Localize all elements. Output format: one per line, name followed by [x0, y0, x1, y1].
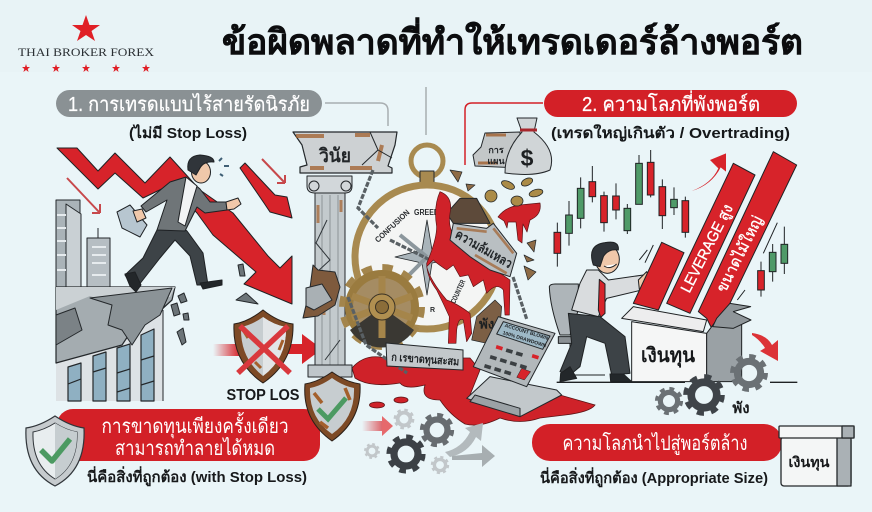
heading pill 1: 1. การเทรดแบบไร้สายรัดนิรภัย — [68, 93, 310, 116]
illustration: city and crumbling ledge — [56, 200, 258, 401]
plate: accumulated losses — [386, 343, 463, 370]
illustration: brass gear — [344, 269, 420, 348]
chart: candlesticks — [554, 150, 788, 297]
title: ข้อผิดพลาดที่ทำให้เทรดเดอร์ล้างพอร์ต — [222, 17, 803, 62]
subheading 1: (ไม่มี Stop Loss) — [129, 123, 247, 142]
heading pill 2 — [544, 90, 797, 117]
bottom callout: right: ความโลภนำไปสู่พอร์ตล้าง — [562, 432, 748, 456]
bottom callout: right — [532, 424, 782, 461]
arrow: red downward — [752, 333, 778, 361]
label: high leverage: LEVERAGE สูง — [678, 202, 738, 296]
heading pill 2: 2. ความโลภที่พังพอร์ต — [582, 90, 760, 116]
illustration: blood and broken compass plate — [427, 192, 517, 343]
caption: appropriate size: นี่คือสิ่งที่ถูกต้อง (Appropriate Size) — [540, 467, 768, 488]
icon: gears and recovery arrows — [362, 410, 495, 473]
illustration: rusted compass: GREED — [414, 208, 439, 217]
illustration: rusted compass — [355, 145, 499, 329]
icon: gears under the box: พัง — [732, 400, 750, 417]
connector lines — [325, 87, 543, 165]
chart: falling red zigzag arrow — [57, 148, 292, 304]
illustration: money bag and plan plate: $ — [521, 145, 534, 171]
illustration: money bag and plan plate: การ — [488, 145, 504, 155]
icon: capital box appropriate size: เงินทุน — [788, 454, 830, 471]
label: large lot size: ขนาดไม้ใหญ่ — [713, 213, 766, 295]
illustration: blood and broken compass plate: ความล้มเหลว — [453, 226, 515, 271]
logo: Thai Broker Forex: THAI BROKER FOREX — [18, 45, 154, 59]
illustration: rusted compass: COUNTER — [449, 278, 468, 305]
illustration: blood and broken compass plate: พัง — [479, 316, 494, 331]
illustration: broken calculator: ACCOUNT BLOWN — [504, 323, 549, 342]
caption: with stop loss: นี่คือสิ่งที่ถูกต้อง (with Stop Loss) — [87, 466, 307, 487]
illustration: chains — [348, 170, 527, 373]
illustration: broken calculator: 100% DRAWDOWN — [502, 330, 547, 349]
icon: failed stop loss shield — [213, 310, 322, 383]
illustration: rusted compass: R — [430, 307, 435, 314]
bottom callout: left: สามารถทำลายได้หมด — [115, 437, 275, 460]
illustration: rusted compass: CONFUSION — [373, 208, 412, 244]
label: discipline: วินัย — [319, 146, 351, 167]
bottom callout: left: การขาดทุนเพียงครั้งเดียว — [102, 412, 288, 439]
plate: accumulated losses: ก เรขาดทุนสะสม — [391, 352, 460, 369]
label: capital on box: เงินทุน — [641, 345, 695, 368]
illustration: broken discipline pillar — [293, 132, 397, 377]
logo: Thai Broker Forex — [18, 15, 154, 72]
icon: rusted pillar shield — [305, 372, 360, 441]
illustration: panicking trader — [117, 155, 241, 292]
illustration: blood puddle — [352, 357, 595, 425]
label: stop loss: STOP LOS — [226, 387, 300, 404]
illustration: money bag and plan plate: แผน — [487, 156, 505, 166]
icon: correct check shield — [26, 416, 84, 486]
bottom callout: left — [57, 409, 320, 461]
icon: capital box appropriate size — [779, 426, 854, 486]
icon: gears under the box — [657, 357, 765, 417]
subheading 2: (เทรดใหญ่เกินตัว / Overtrading) — [551, 124, 790, 142]
illustration: overtrading trader and capital box — [549, 152, 797, 382]
illustration: money bag and plan plate — [450, 118, 552, 280]
illustration: broken calculator — [467, 317, 562, 417]
